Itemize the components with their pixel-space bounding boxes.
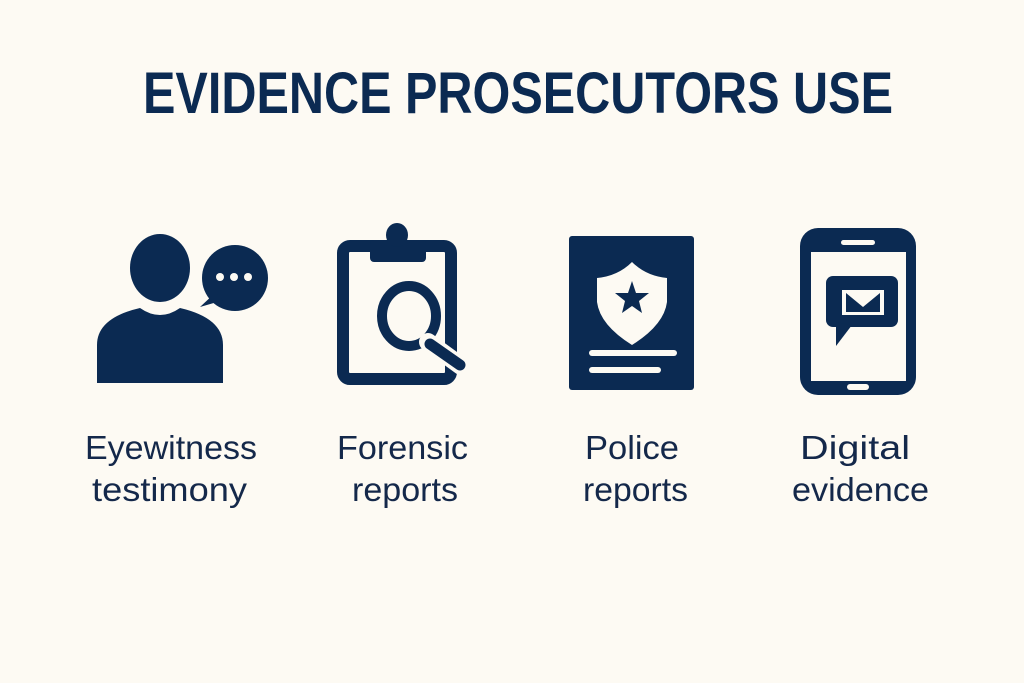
icon: phone with message (800, 228, 916, 395)
label: digital evidence: Digital (800, 429, 910, 466)
label: forensic reports: reports (352, 471, 458, 508)
label: eyewitness testimony (85, 429, 257, 508)
label: forensic reports (337, 429, 468, 508)
label: police reports: Police (585, 429, 679, 466)
label: digital evidence (792, 429, 929, 508)
label: forensic reports: Forensic (337, 429, 468, 466)
icon: clipboard with magnifier (343, 223, 461, 379)
icon: police report (569, 236, 694, 390)
title: EVIDENCE PROSECUTORS USE (143, 61, 893, 126)
label: police reports (583, 429, 688, 508)
label: police reports: reports (583, 471, 688, 508)
label: eyewitness testimony: testimony (92, 471, 248, 508)
label: eyewitness testimony: Eyewitness (85, 429, 257, 466)
label: digital evidence: evidence (792, 471, 929, 508)
icon: eyewitness person with speech bubble (97, 234, 268, 383)
